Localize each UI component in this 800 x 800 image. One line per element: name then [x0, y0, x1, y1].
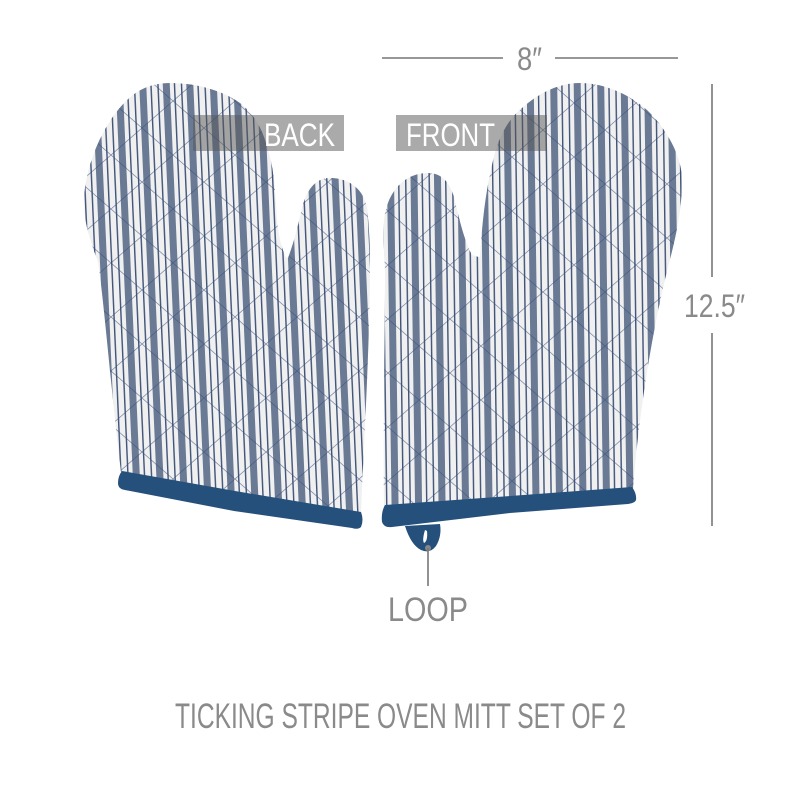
- label: back: [193, 115, 344, 153]
- front oven mitt: [382, 83, 682, 551]
- back oven mitt: [84, 83, 370, 529]
- back mitt navy binding: [118, 471, 362, 529]
- front mitt navy binding: [382, 487, 636, 527]
- loop callout: LOOP: [388, 591, 468, 629]
- label: front: FRONT: [406, 117, 495, 153]
- front mitt fabric: [384, 83, 682, 506]
- height dimension: 12.5 inches: 12.5″: [684, 288, 745, 324]
- label: back: BACK: [264, 117, 335, 153]
- loop callout: [388, 545, 468, 629]
- width dimension: 8 inches: 8″: [517, 41, 542, 77]
- label: front: [396, 115, 547, 153]
- title: TICKING STRIPE OVEN MITT SET OF 2: [175, 697, 626, 736]
- back mitt fabric: [84, 83, 370, 514]
- hanging loop: [405, 524, 440, 551]
